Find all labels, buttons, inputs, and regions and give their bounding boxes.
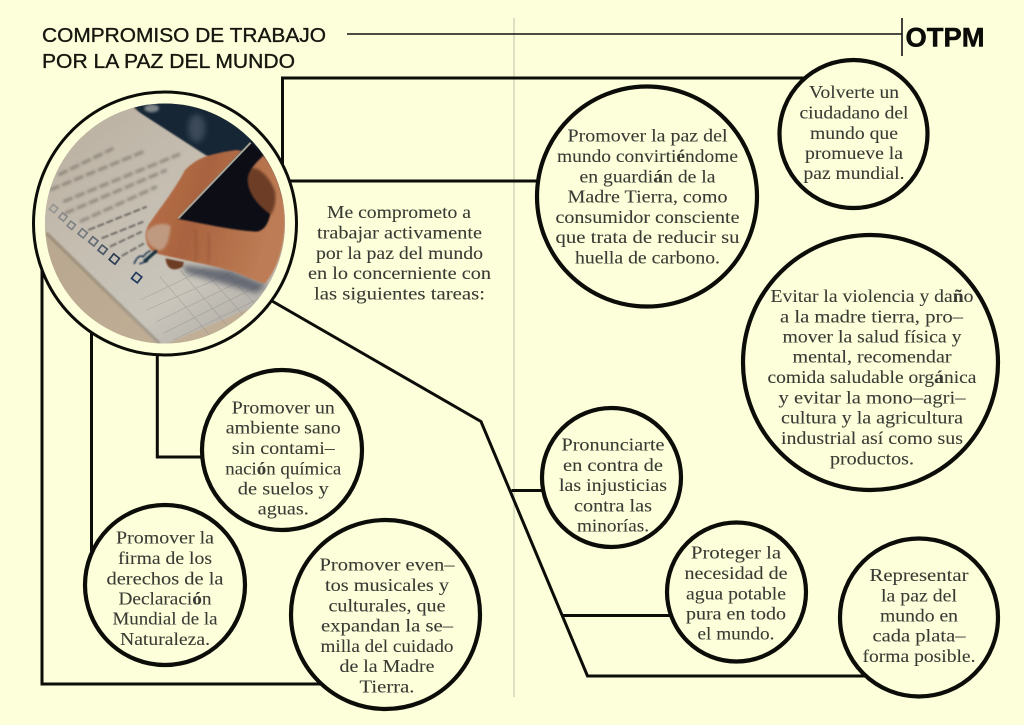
circle: evitar la violencia: [743, 235, 998, 490]
circle: representar la paz: cada plata–: [872, 626, 966, 646]
finger knuckle: [166, 258, 184, 269]
circle: guardián de la Madre Tierra: huella de carbono.: [575, 248, 720, 268]
circle: Declaración Mundial de la Naturaleza: Mundial de la: [112, 609, 218, 629]
circle: representar la paz: mundo en: [880, 606, 958, 626]
circle: eventos musicales y culturales: Promover even–: [320, 555, 455, 575]
circle: ciudadano del mundo: paz mundial.: [804, 163, 904, 183]
hand: [146, 150, 285, 284]
circle: guardián de la Madre Tierra: en guardi án de la: [580, 166, 716, 186]
pen grip dark area: [178, 142, 270, 232]
intro text: Me comprometo a: [327, 202, 471, 222]
circle: guardián de la Madre Tierra: Promover la paz del: [568, 126, 728, 146]
circle: Declaración Mundial de la Naturaleza: Naturaleza.: [120, 629, 210, 649]
circle: ciudadano del mundo: ciudadano del: [800, 102, 909, 122]
pen tip: [144, 251, 157, 262]
photo: hand writing a checklist: [33, 92, 300, 355]
circle: agua potable: necesidad de: [684, 563, 788, 583]
circle: ambiente sano: ambiente sano: [226, 418, 341, 438]
circle: guardián de la Madre Tierra: mundo convirti éndome: [557, 146, 738, 166]
circle: representar la paz: Representar: [870, 565, 969, 585]
circle: injusticias contra las minorías: Pronunciarte: [562, 435, 665, 455]
circle: agua potable: agua potable: [686, 583, 786, 603]
circle: evitar la violencia: Evitar la violencia y da ño: [770, 286, 974, 306]
fingernail: [146, 224, 171, 251]
checklist marks: [49, 204, 142, 283]
intro text: en lo concerniente con: [308, 263, 491, 283]
handwritten lines: [50, 148, 180, 222]
pen barrel: [178, 143, 251, 218]
hand shadow: [182, 265, 267, 293]
circle: Declaración Mundial de la Naturaleza: derechos de la: [106, 568, 224, 588]
circle: eventos musicales y culturales: [291, 520, 480, 709]
circle: ciudadano del mundo: promueve la: [805, 143, 903, 163]
page grid: [140, 268, 270, 343]
circle: evitar la violencia: productos.: [830, 448, 914, 468]
title: POR LA PAZ DEL MUNDO: [42, 50, 295, 73]
notebook page: [45, 108, 285, 344]
circle: agua potable: el mundo.: [698, 623, 774, 643]
circle: evitar la violencia: y evitar la mono–agri–: [778, 387, 966, 407]
circle: ambiente sano: de suelos y: [238, 478, 329, 498]
circle: agua potable: Proteger la: [691, 543, 781, 563]
connector: photo diagonal to lower-right circles: [272, 301, 870, 676]
circle: evitar la violencia: comida saludable org ánica: [768, 367, 977, 387]
circle: evitar la violencia: a la madre tierra, pro–: [780, 306, 963, 326]
circle: evitar la violencia: mover la salud física y: [782, 327, 962, 347]
connector: photo to left circles: [42, 265, 325, 684]
circle: evitar la violencia: industrial así como sus: [781, 428, 963, 448]
circle: evitar la violencia: mental, recomendar: [792, 347, 952, 367]
circle: guardián de la Madre Tierra: Madre Tierra, como: [568, 186, 728, 206]
circle: ciudadano del mundo: [780, 60, 928, 208]
circle: eventos musicales y culturales: tos musicales y: [325, 575, 449, 595]
circle: eventos musicales y culturales: expandan la se–: [321, 616, 453, 636]
circle: Declaración Mundial de la Naturaleza: Declaraci ón: [118, 588, 212, 608]
circle: guardián de la Madre Tierra: [537, 86, 757, 306]
circle: representar la paz: la paz del: [881, 585, 957, 605]
circle: eventos musicales y culturales: de la Madre: [340, 656, 435, 676]
back of hand shadow: [245, 168, 275, 217]
circle: representar la paz: [840, 538, 998, 696]
photo background dark: [133, 104, 283, 202]
circle: eventos musicales y culturales: milla del cuidado: [320, 636, 454, 656]
circle: ambiente sano: aguas.: [258, 499, 309, 519]
finger crease: [195, 230, 209, 263]
circle: ambiente sano: nación química: [225, 458, 341, 478]
circle: Declaración Mundial de la Naturaleza: Promover la: [116, 528, 214, 548]
wood edge shadow: [47, 233, 159, 343]
title: [42, 24, 326, 73]
circle: guardián de la Madre Tierra: consumidor consciente: [556, 207, 740, 227]
circle: injusticias contra las minorías: las injusticias: [559, 475, 667, 495]
circle: eventos musicales y culturales: Tierra.: [360, 676, 414, 696]
circle: eventos musicales y culturales: culturales, que: [328, 595, 446, 615]
circle: ciudadano del mundo: mundo que: [810, 123, 898, 143]
circle: injusticias contra las minorías: contra las: [574, 495, 652, 515]
circle: injusticias contra las minorías: en contra de: [563, 455, 663, 475]
logo: OTPM: OTPM: [906, 22, 984, 52]
intro text: por la paz del mundo: [316, 243, 483, 263]
circle: evitar la violencia: cultura y la agricultura: [781, 408, 963, 428]
title: COMPROMISO DE TRABAJO: [42, 24, 326, 47]
circle: injusticias contra las minorías: minorías.: [577, 516, 649, 536]
circle: ambiente sano: sin contami–: [232, 438, 335, 458]
circle: agua potable: [667, 522, 806, 662]
circle: representar la paz: forma posible.: [862, 646, 976, 666]
circle: ambiente sano: Promover un: [232, 397, 335, 417]
circle: ciudadano del mundo: Volverte un: [809, 82, 899, 102]
circle: agua potable: pura en todo: [686, 603, 786, 623]
intro text: [308, 202, 491, 304]
intro text: trabajar activamente: [317, 222, 482, 242]
header rule: [347, 18, 902, 56]
circle: guardián de la Madre Tierra: que trata de reducir su: [556, 227, 740, 247]
intro text: las siguientes tareas:: [314, 284, 485, 304]
center divider line: [513, 18, 515, 697]
circle: Declaración Mundial de la Naturaleza: firma de los: [118, 548, 212, 568]
circle: Declaración Mundial de la Naturaleza: [85, 505, 245, 665]
circle: ambiente sano: [202, 370, 362, 530]
circle: injusticias contra las minorías: [542, 408, 681, 547]
connector: photo to top-right circles: [282, 78, 810, 181]
